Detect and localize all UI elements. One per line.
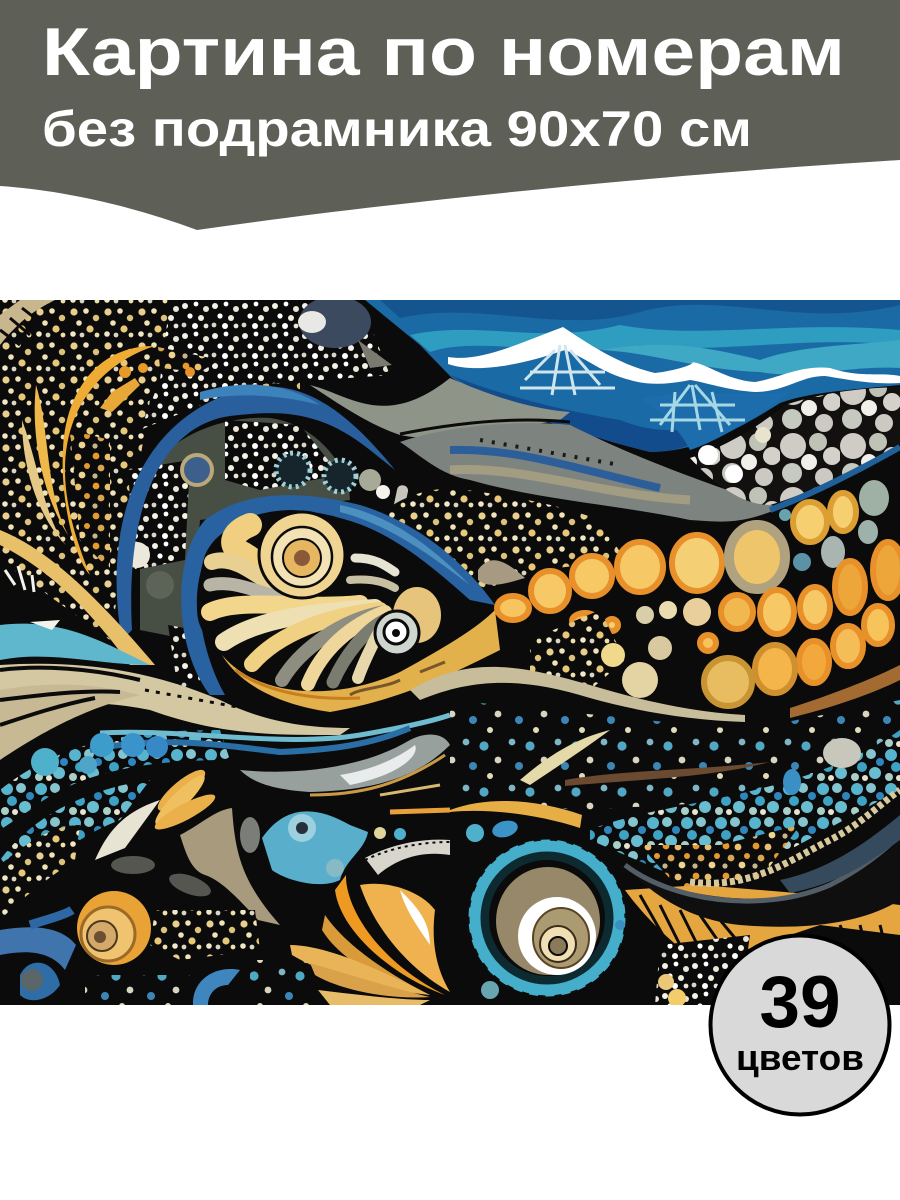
pebble field: [690, 387, 900, 571]
orange pebbles: [497, 493, 900, 706]
cream dot field: [389, 489, 619, 588]
title: Картина по номерам: [42, 14, 845, 90]
blue outer arc: [117, 385, 395, 640]
gold band: [222, 610, 500, 712]
cream pebbles: [530, 598, 711, 698]
blue inner swoosh: [181, 495, 495, 695]
orange fan shell: [290, 840, 450, 1005]
top centre dark textured blob: [298, 296, 392, 368]
field behind blue arc: [124, 418, 409, 690]
left orange feathers: [0, 346, 220, 665]
yellow fan: [95, 764, 219, 860]
shell spiral: [259, 512, 345, 598]
lower left scaled field: [0, 780, 150, 920]
blue flower: [262, 811, 406, 884]
header banner: [0, 0, 900, 230]
badge: 39 colours: [710, 936, 890, 1114]
banner shape: [0, 0, 900, 230]
teal dot band: [0, 715, 450, 830]
small gold shell: [77, 891, 151, 965]
mid fans: [380, 730, 770, 812]
tan ribbon and tiled row: [410, 665, 900, 722]
blue spirals: [0, 910, 240, 1005]
shell fan lobes: [210, 525, 395, 684]
gold stroke over big shell: [450, 801, 582, 842]
right dark band and orange fringe: [620, 790, 900, 1007]
small spiral: [393, 587, 441, 643]
top-left dot field: [0, 300, 390, 640]
painting: [0, 296, 900, 1007]
badge number: 39: [759, 962, 841, 1043]
badge label: цветов: [736, 1037, 864, 1078]
small dots by shell: [85, 910, 310, 1005]
subtitle: без подрамника 90х70 см: [42, 101, 752, 157]
rocky shell: [111, 808, 280, 925]
big shell with teal ring: [471, 842, 625, 999]
left feathers: [0, 664, 350, 760]
lower dark dotted fields: [450, 700, 900, 890]
badge circle: [710, 936, 890, 1114]
left light-blue wedge: [0, 566, 150, 665]
wave crests: [448, 327, 900, 432]
silver fish: [240, 735, 450, 795]
main shell: [197, 510, 445, 688]
sea: [365, 300, 900, 452]
grey mottled bands: [310, 378, 780, 522]
